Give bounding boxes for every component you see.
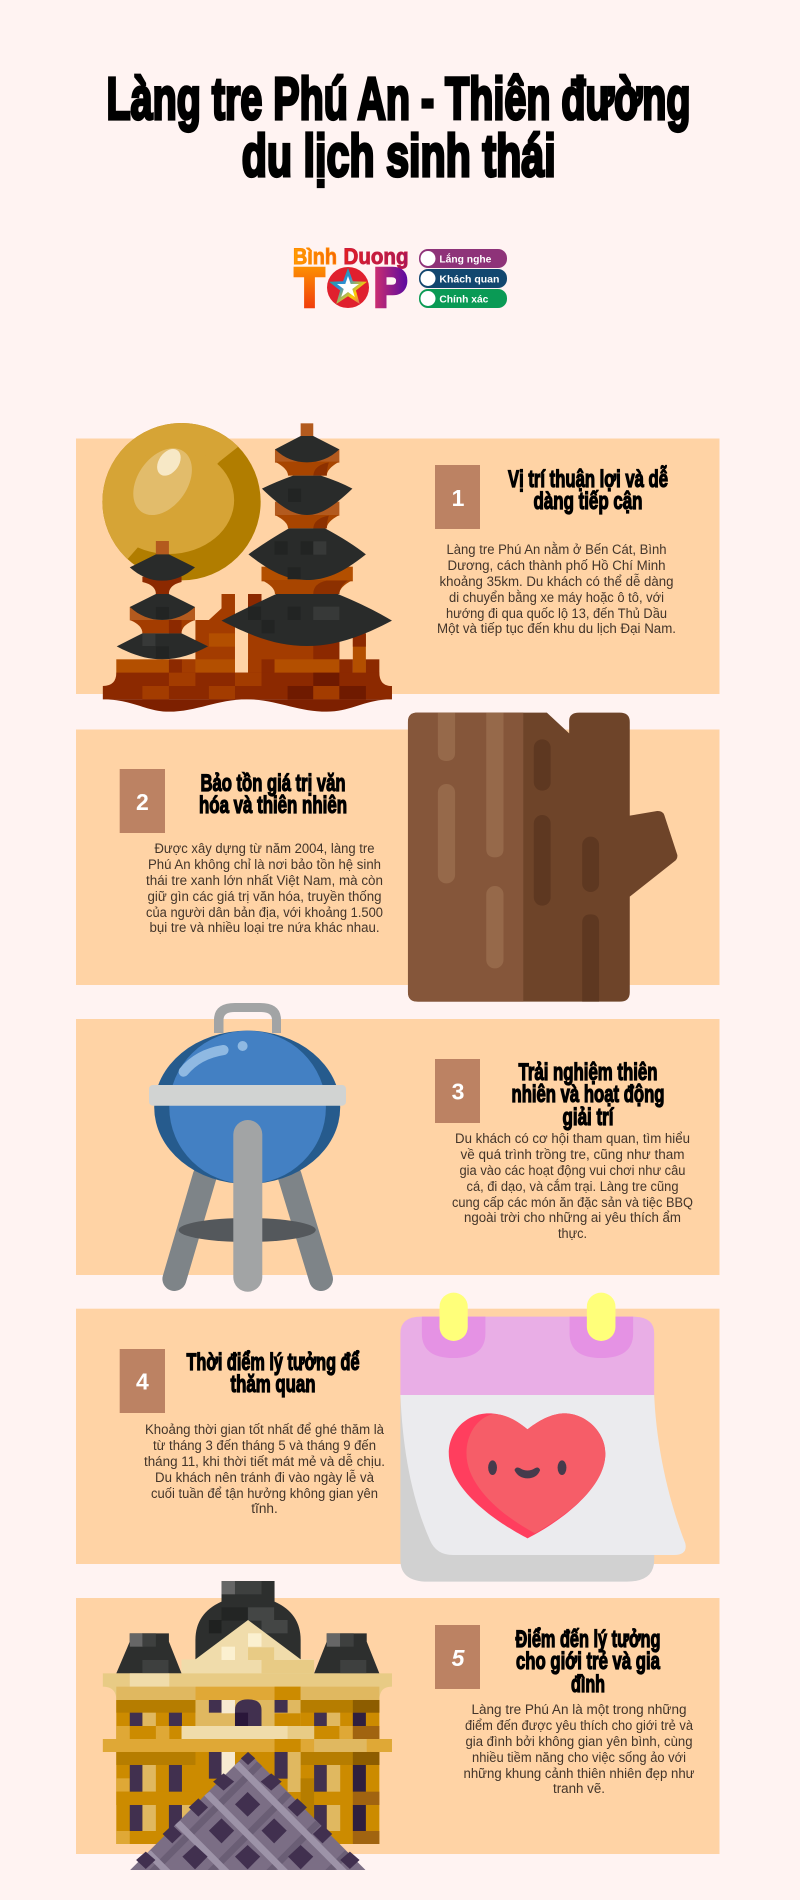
body text 1: Làng tre Phú An nằm ở Bến Cát, Bình bbox=[446, 542, 666, 557]
logo pills: Lắng nghe bbox=[439, 253, 492, 266]
body text 5: điểm đến được yêu thích cho giới trẻ và bbox=[465, 1718, 693, 1733]
title: du lịch sinh thái bbox=[242, 123, 556, 189]
number badge 3 bbox=[435, 1059, 480, 1123]
icon: bamboo trunk bbox=[408, 713, 677, 1002]
body text 3: về quá trình trồng tre, cũng như tham bbox=[460, 1147, 684, 1162]
icon: palace and glass pyramid bbox=[103, 1581, 392, 1900]
body text 2 bbox=[146, 841, 383, 935]
body text 4: Khoảng thời gian tốt nhất để ghé thăm là bbox=[145, 1422, 384, 1437]
body text 3: cung cấp các món ăn đặc sản và tiệc BBQ bbox=[452, 1195, 693, 1210]
body text 3: Du khách có cơ hội tham quan, tìm hiểu bbox=[455, 1131, 690, 1146]
body text 5: những khung cảnh thiên nhiên đẹp như bbox=[464, 1766, 694, 1781]
panel 2: heritage bbox=[76, 713, 720, 1002]
body text 4: Du khách nên tránh đi vào ngày lễ và bbox=[155, 1470, 374, 1485]
body text 4: cuối tuần để tận hưởng không gian yên bbox=[151, 1486, 378, 1501]
body text 2: của người dân bản địa, với khoảng 1.500 bbox=[146, 905, 383, 920]
body text 4: tĩnh. bbox=[251, 1501, 278, 1516]
number badge 5: 5 bbox=[452, 1645, 466, 1671]
body text 4: từ tháng 3 đến tháng 5 và tháng 9 đến bbox=[153, 1438, 376, 1453]
body text 1: Dương, cách thành phố Hồ Chí Minh bbox=[448, 558, 666, 573]
heading 1: dàng tiếp cận bbox=[534, 488, 642, 515]
heading 3: nhiên và hoạt động bbox=[512, 1081, 664, 1108]
number badge 1 bbox=[435, 465, 480, 529]
panel 3: activities bbox=[76, 1003, 720, 1292]
body text 3: cá, đi dạo, và cắm trại. Làng tre cũng bbox=[466, 1179, 678, 1194]
logo wordmark: O bbox=[328, 258, 368, 318]
body text 5: tranh vẽ. bbox=[553, 1781, 605, 1796]
body text 5: Làng tre Phú An là một trong những bbox=[472, 1702, 686, 1717]
heading 2: Bảo tồn giá trị văn bbox=[200, 770, 346, 797]
logo wordmark: T bbox=[295, 258, 324, 318]
logo wordmark: Duong bbox=[344, 244, 408, 269]
body text 3: thực. bbox=[558, 1226, 587, 1241]
logo pills: Khách quan bbox=[439, 274, 499, 286]
number badge 3: 3 bbox=[452, 1078, 464, 1104]
body text 2: giữ gìn các giá trị văn hóa, truyền thống bbox=[148, 889, 382, 904]
heading 1 bbox=[508, 465, 668, 515]
logo pills bbox=[419, 249, 507, 308]
panel 1: location bbox=[76, 423, 720, 712]
heading 2: hóa và thiên nhiên bbox=[199, 792, 347, 819]
logo: Bình Duong TOP bbox=[293, 244, 507, 318]
body text 5: nhiều tiềm năng cho việc sống ảo với bbox=[472, 1750, 686, 1765]
body text 1: di chuyển bằng xe máy hoặc ô tô, với bbox=[449, 590, 664, 605]
number badge 4: 4 bbox=[136, 1368, 149, 1394]
body text 5 bbox=[464, 1702, 694, 1796]
logo pills: Chính xác bbox=[439, 294, 489, 306]
heading 3: Trải nghiệm thiên bbox=[518, 1059, 658, 1086]
heading 3 bbox=[512, 1059, 664, 1131]
number badge 2 bbox=[120, 769, 165, 833]
heading 5: đình bbox=[571, 1671, 605, 1698]
icon: charcoal grill bbox=[149, 1003, 346, 1292]
body text 1 bbox=[437, 542, 676, 636]
body text 3: ngoài trời cho những ai yêu thích ẩm bbox=[464, 1210, 681, 1225]
number badge 1: 1 bbox=[452, 485, 465, 511]
heading 5 bbox=[516, 1626, 660, 1698]
heading 4 bbox=[186, 1349, 360, 1398]
body text 3 bbox=[452, 1131, 693, 1241]
heading 2 bbox=[199, 770, 347, 819]
logo wordmark: P bbox=[374, 258, 407, 318]
panel 5: ideal destination bbox=[76, 1581, 720, 1900]
body text 2: thái tre xanh lớn nhất Việt Nam, mà còn bbox=[146, 873, 383, 888]
logo wordmark: Bình bbox=[293, 244, 337, 269]
heading 5: cho giới trẻ và gia bbox=[516, 1648, 660, 1675]
body text 1: hướng đi qua quốc lộ 13, đến Thủ Dầu bbox=[446, 606, 667, 621]
number badge 2: 2 bbox=[136, 789, 149, 815]
icon: pagoda and moon bbox=[102, 423, 392, 712]
icon: calendar with heart bbox=[400, 1293, 686, 1582]
body text 2: Phú An không chỉ là nơi bảo tồn hệ sinh bbox=[148, 857, 381, 872]
heading 3: giải trí bbox=[562, 1104, 614, 1131]
heading 5: Điểm đến lý tưởng bbox=[516, 1626, 660, 1653]
body text 3: gia vào các hoạt động vui chơi như câu bbox=[460, 1163, 686, 1178]
title bbox=[106, 66, 690, 189]
body text 1: khoảng 35km. Du khách có thể dễ dàng bbox=[440, 574, 674, 589]
body text 2: bụi tre và nhiều loại tre nứa khác nhau. bbox=[150, 920, 380, 935]
heading 4: thăm quan bbox=[230, 1371, 316, 1398]
body text 4 bbox=[144, 1422, 385, 1516]
body text 2: Được xây dựng từ năm 2004, làng tre bbox=[154, 841, 374, 856]
body text 5: gia đình bởi không gian yên bình, cùng bbox=[466, 1734, 692, 1749]
panel 4: best time bbox=[76, 1293, 720, 1582]
logo wordmark bbox=[293, 244, 408, 318]
number badge 4 bbox=[120, 1349, 165, 1413]
body text 4: tháng 11, khi thời tiết mát mẻ và dễ chịu. bbox=[144, 1454, 385, 1469]
body text 1: Một và tiếp tục đến khu du lịch Đại Nam. bbox=[437, 621, 676, 636]
number badge 5 bbox=[435, 1625, 480, 1689]
heading 4: Thời điểm lý tưởng để bbox=[186, 1349, 360, 1376]
heading 1: Vị trí thuận lợi và dễ bbox=[508, 465, 668, 493]
